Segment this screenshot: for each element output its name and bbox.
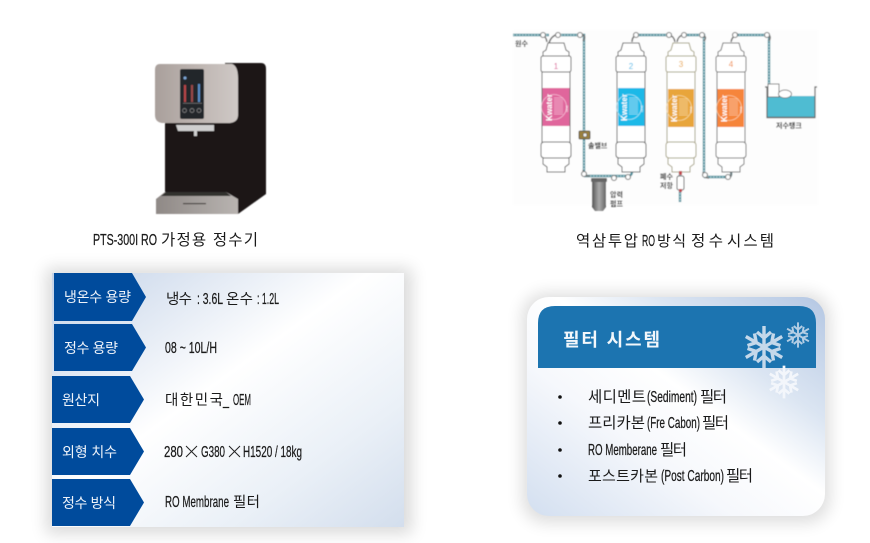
diagram labels: 펌프 <box>610 199 623 209</box>
item: post carbon: 필터 <box>726 464 753 486</box>
filter 2 blue <box>616 43 646 172</box>
drip tray base <box>156 192 238 214</box>
item: pre carbon: 필터 <box>702 411 729 433</box>
panel: specifications table: OEM <box>233 392 251 409</box>
caption: product name <box>93 228 258 250</box>
row: purification method <box>52 479 260 526</box>
row: purification capacity <box>54 324 217 371</box>
diagram labels: 압력 <box>610 190 623 200</box>
pressure pump <box>591 178 607 211</box>
filter 2 blue: 2 <box>629 62 634 71</box>
water pipes <box>513 32 770 202</box>
item: sediment <box>558 385 727 407</box>
row: hot and cold capacity <box>54 273 279 321</box>
row: dimensions: G380 <box>201 444 225 461</box>
row: purification method: 필터 <box>233 491 260 512</box>
diagram labels: 저수탱크 <box>776 121 802 131</box>
control display <box>180 69 204 119</box>
item: pre carbon: 프리카본 <box>588 411 645 433</box>
diagram labels: 폐수 <box>660 172 673 182</box>
panel: specifications table <box>46 268 412 534</box>
row: dimensions: H1520 / 18kg <box>243 444 302 461</box>
RO system diagram <box>513 30 818 211</box>
filter 2 blue: one <box>639 105 644 112</box>
row: origin: 대한민국 <box>165 389 223 410</box>
diagram labels: 원수 <box>515 39 528 49</box>
filter 2 blue: Kwater <box>620 94 629 121</box>
row: hot and cold capacity: : 1.2L <box>257 291 279 308</box>
diagram labels <box>515 39 802 209</box>
filter 4 orange: Kwater <box>720 95 729 122</box>
filter 4 orange: one <box>738 106 743 113</box>
filter list <box>558 385 753 486</box>
diagram labels: 저항 <box>660 181 673 191</box>
item: RO membrane: 필터 <box>660 438 687 460</box>
reservoir tank <box>765 84 817 118</box>
row: hot and cold capacity: 냉온수 용량 <box>64 287 131 307</box>
item: sediment: (Sediment) <box>647 389 697 406</box>
row: origin: 원산지 <box>62 390 100 410</box>
row: dimensions <box>52 428 302 475</box>
filter 4 orange <box>716 43 746 172</box>
row: hot and cold capacity: 냉수 <box>166 288 192 309</box>
caption: product name: PTS-300I RO <box>93 232 157 249</box>
row: purification capacity: 정수 용량 <box>64 338 118 358</box>
caption: system name: 정수 <box>691 229 723 251</box>
caption: system name: RO <box>642 233 655 250</box>
filter 3 amber <box>666 43 696 172</box>
caption: system name: 방식 <box>657 230 686 251</box>
solenoid valve <box>579 131 590 139</box>
row: purification capacity: 08 ~ 10L/H <box>165 340 217 357</box>
filter 1 pink: one <box>564 105 569 112</box>
row: dimensions: 280 <box>164 444 183 461</box>
filter 3 amber: Kwater <box>670 95 679 122</box>
waste water resistor <box>677 171 684 192</box>
top head panel <box>155 64 238 123</box>
filter 4 orange: 4 <box>729 60 734 69</box>
product photo: water purifier <box>155 63 266 214</box>
caption: product name: 가정용 정수기 <box>161 228 258 250</box>
row: purification method: RO Membrane <box>165 494 229 511</box>
filter 1 pink: 1 <box>554 62 559 71</box>
filter 3 amber: 3 <box>679 60 684 69</box>
item: pre carbon: (Fre Cabon) <box>647 415 700 432</box>
row: hot and cold capacity: 온수 <box>226 288 253 309</box>
panel: filter system <box>522 293 830 523</box>
diagram backdrop <box>513 30 818 205</box>
item: sediment: 필터 <box>700 385 727 407</box>
row: origin: _ <box>222 392 230 409</box>
row: origin <box>52 376 251 423</box>
item: RO membrane <box>558 438 687 460</box>
caption: system name: 시스템 <box>727 229 774 251</box>
item: post carbon <box>558 464 753 486</box>
item: pre carbon <box>558 411 729 433</box>
item: post carbon: 포스트카본 <box>588 465 658 486</box>
item: sediment: 세디멘트 <box>588 385 646 407</box>
row: dimensions: 외형 치수 <box>62 442 117 462</box>
row: hot and cold capacity: : 3.6L <box>197 291 223 308</box>
item: RO membrane: RO Memberane <box>588 442 657 459</box>
filter 1 pink <box>541 43 571 172</box>
cabinet body <box>165 63 266 214</box>
filter 1 pink: Kwater <box>545 94 554 121</box>
row: purification method: 정수 방식 <box>62 493 116 513</box>
diagram labels: 솔밸브 <box>588 141 608 151</box>
caption: system name: 역삼투압 <box>576 229 638 251</box>
item: post carbon: (Post Carbon) <box>661 468 724 485</box>
caption: system name <box>576 229 774 251</box>
header bar <box>538 306 816 368</box>
filter 3 amber: one <box>688 106 693 113</box>
icon: snowflakes <box>742 322 811 398</box>
faucet <box>176 125 214 136</box>
header bar: 필터 시스템 <box>563 326 660 352</box>
